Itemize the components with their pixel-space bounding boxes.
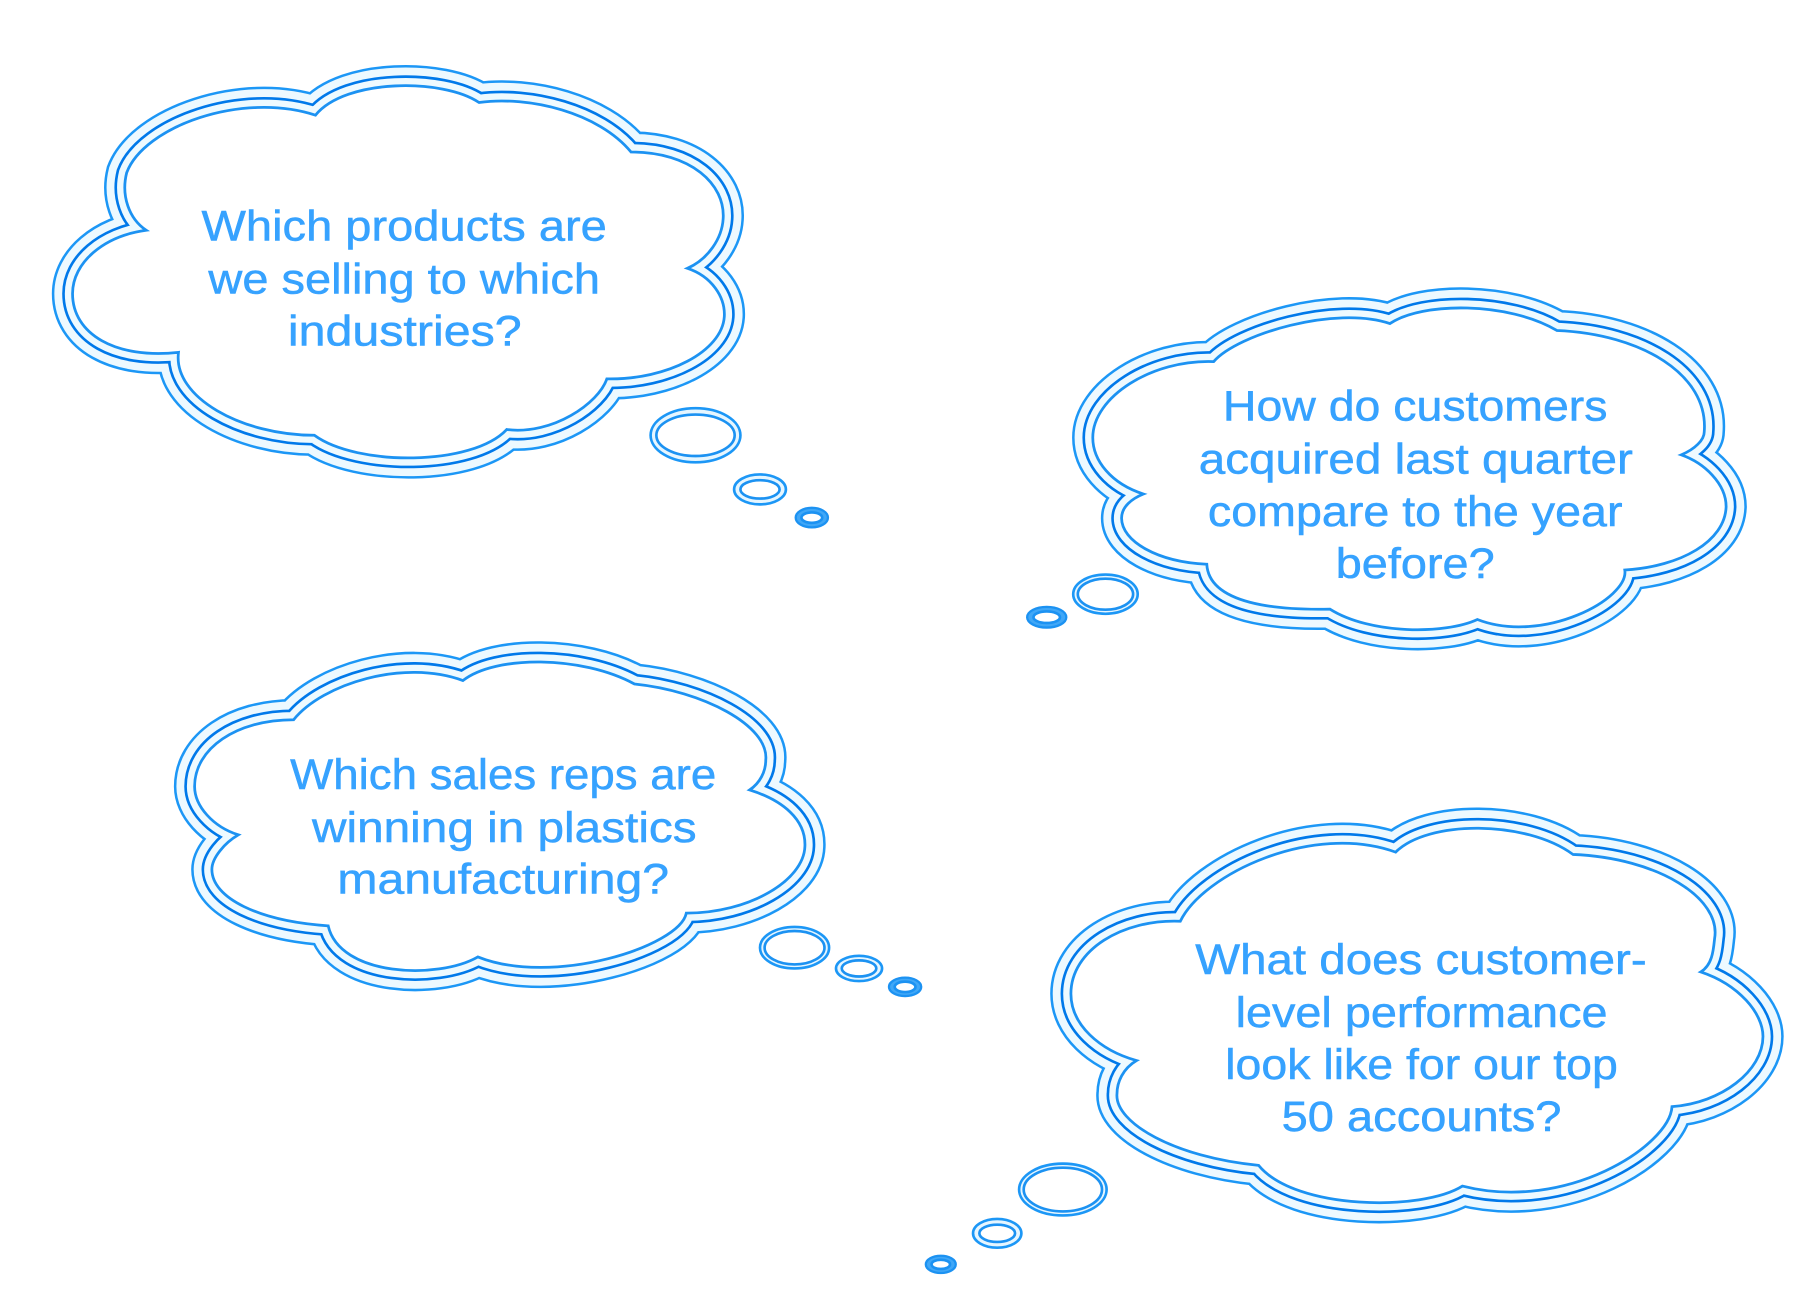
trailing thought bubbles: customers acquired <box>1027 575 1138 628</box>
cloud outline: products <box>73 86 724 458</box>
question text: sales reps: manufacturing? <box>337 856 669 904</box>
question text: top 50 accounts: What does customer- <box>1195 936 1647 984</box>
question text: products: industries? <box>288 307 522 355</box>
question text: customers acquired: acquired last quarter <box>1199 435 1633 483</box>
question text: products: we selling to which <box>207 256 600 304</box>
panel: thought cloud, customers acquired <box>1027 308 1726 630</box>
panel: thought cloud, sales reps <box>195 662 921 996</box>
question text: products <box>202 203 607 355</box>
question text: sales reps: winning in plastics <box>311 804 697 852</box>
question text: sales reps: Which sales reps are <box>290 751 716 799</box>
question text: products: Which products are <box>202 203 607 251</box>
question text: top 50 accounts <box>1195 936 1647 1141</box>
panel: thought cloud, products and industries <box>73 86 828 527</box>
panel: thought cloud, top 50 accounts <box>926 828 1763 1273</box>
question text: customers acquired: before? <box>1336 540 1495 588</box>
cloud outline: customers acquired <box>1093 308 1726 630</box>
cloud outline: top 50 accounts <box>1071 828 1763 1203</box>
question text: sales reps <box>290 751 716 904</box>
question text: top 50 accounts: look like for our top <box>1225 1041 1618 1089</box>
cloud outline: sales reps <box>195 662 805 971</box>
question text: top 50 accounts: level performance <box>1236 989 1608 1037</box>
question text: customers acquired: How do customers <box>1223 382 1608 430</box>
trailing thought bubbles: sales reps <box>760 927 921 996</box>
trailing thought bubbles: products <box>651 408 828 527</box>
question text: customers acquired <box>1199 382 1633 588</box>
question text: top 50 accounts: 50 accounts? <box>1282 1093 1561 1141</box>
question text: customers acquired: compare to the year <box>1208 488 1622 536</box>
trailing thought bubbles: top 50 accounts <box>926 1164 1107 1273</box>
